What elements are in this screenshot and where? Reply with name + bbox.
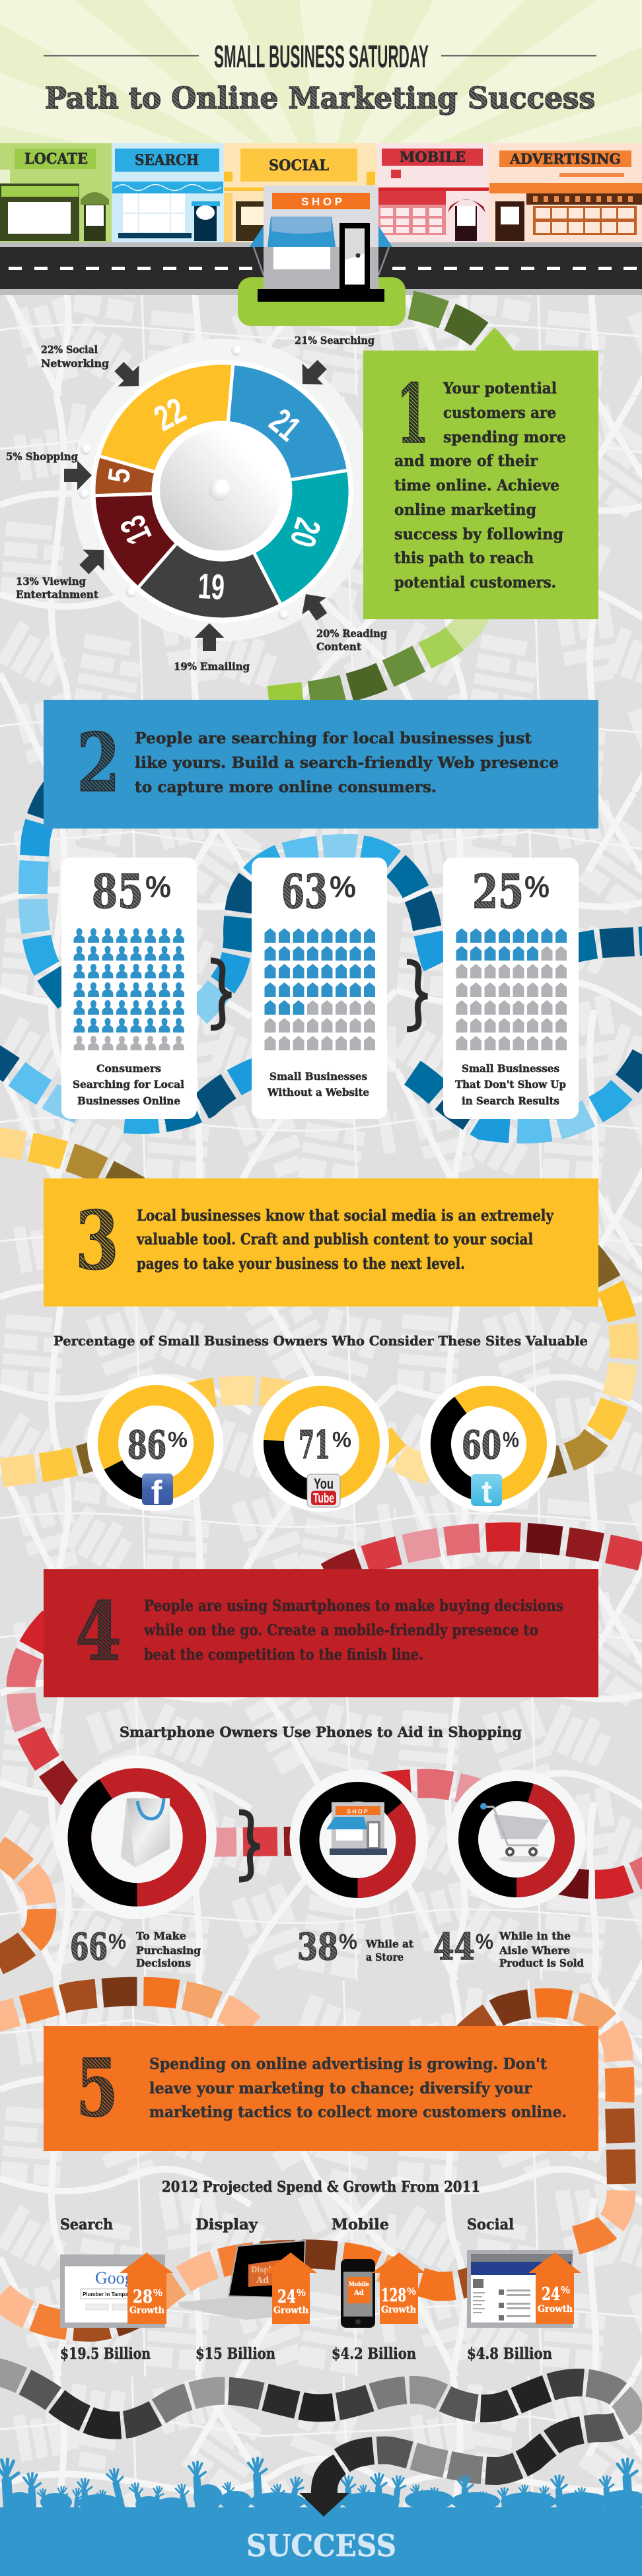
card: 85% consumers: Businesses Online [77,1095,180,1107]
image: laptop [178,2241,310,2320]
path: orange [0,1848,622,2327]
panel 5: leave your marketing to chance; diversify your [149,2080,532,2097]
growth arrow 128%: % [407,2286,416,2297]
icon: shopping bag [121,1798,170,1868]
icon: shopping cart [480,1803,550,1862]
card: 25% not in search [443,858,579,1119]
house pictogram [456,928,567,1050]
donut: twitter 60%: % [503,1427,519,1452]
image: google browser: Google [95,2268,146,2288]
growth arrow 24%: 24 [277,2287,296,2307]
growth arrow 24%: 24 [542,2284,560,2305]
segment: searching 21 [228,364,348,480]
growth arrow 24% [264,2253,317,2324]
icon: facebook: f [151,1474,162,1511]
storefront: advertising: ADVERTISING [509,151,621,167]
column: social: Social [467,2216,514,2233]
shop building: SHOP [301,195,342,208]
wheel labels and arrows: Entertainment [16,588,99,601]
panel 3: pages to take your business to the next level. [137,1255,465,1273]
icon: mini shop [326,1802,387,1855]
panel 1: potential customers. [394,574,556,592]
panel 2: People are searching for local businesses just [135,729,532,747]
stat: 66%: 66 [70,1925,108,1968]
crowd silhouette [0,2458,642,2576]
icon: youtube: Tube [313,1491,334,1506]
panel 4: beat the competition to the finish line. [144,1646,423,1664]
card: 63% no website: % [330,869,356,904]
image: smartphone: Ad [353,2289,364,2297]
donut: youtube 71%: 71 [299,1423,330,1468]
panel 5: 5 [76,2042,118,2135]
icon: twitter: t [482,1475,492,1510]
column: mobile: $4.2 Billion [332,2345,416,2363]
card: 25% not in search: in Search Results [462,1095,559,1107]
panel 1: time online. Achieve [394,477,559,494]
column: social [467,2216,581,2363]
card: 63% no website: 63 [281,864,328,919]
green start tab [238,277,406,326]
panel 1: customers are [443,404,556,422]
panel 1: online marketing [394,501,536,519]
wheel labels and arrows: Networking [41,357,109,370]
wheel numbers: 22 [148,390,192,439]
path: red [21,1537,642,1884]
image: smartphone [341,2259,375,2328]
header sunburst background [0,0,642,198]
path: green [264,305,522,701]
image: google browser: Plumber in Tampa, FL [83,2291,137,2297]
storefront: social [224,143,376,242]
stat: 66%: Purchasing [136,1944,201,1957]
column: social: $4.8 Billion [467,2345,552,2363]
column: search: Search [60,2216,113,2233]
column: display: Display [196,2216,258,2233]
growth arrow 24%: Growth [538,2304,573,2315]
panel 4: 4 [75,1584,122,1679]
path: yellow [0,1141,624,1474]
heading: valuable sites: Percentage of Small Business Owners Who Consider These Sites Valuable [54,1333,588,1349]
stat: 44%: 44 [433,1925,475,1968]
stat: 38%: % [339,1930,357,1953]
donut: twitter 60% [420,1376,556,1512]
stat: 66%: Decisions [136,1957,191,1969]
card: 63% no website: Small Businesses [269,1070,367,1083]
stat: 66%: % [108,1930,126,1953]
storefront: search [112,143,224,242]
wheel chart: internet time [71,339,374,641]
path: blue [0,789,642,1129]
panel 1: and more of their [394,452,538,470]
image: laptop: Ad [256,2276,269,2286]
panel 1: this path to reach [394,549,534,567]
growth arrow 24%: Growth [273,2305,308,2316]
panel 2: 2 [77,715,120,810]
segment: emailing 19 [138,543,281,619]
stat: 38%: 38 [297,1925,338,1968]
column: mobile: Mobile [332,2216,389,2233]
stat: 38% [297,1925,417,1968]
card: 85% consumers: 85 [92,864,143,919]
donut: 38% at a store [289,1769,428,1908]
column: mobile [332,2216,425,2363]
panel 4: People are using Smartphones to make buying decisions [144,1597,563,1615]
panel 3: valuable tool. Craft and publish content to your social [136,1231,533,1248]
wheel labels and arrows: 13% Viewing [16,575,86,588]
people pictogram [74,928,184,1050]
card: 85% consumers: Searching for Local [73,1078,184,1091]
icon: youtube: You [314,1475,334,1492]
wheel numbers: 20 [282,514,328,552]
panel 1: spending more [443,428,566,446]
column: search [60,2216,173,2363]
card: 63% no website [252,858,387,1119]
growth arrow 28%: % [153,2288,162,2299]
wheel labels and arrows: 19% Emailing [174,660,250,673]
icon: mini shop: SHOP [347,1808,369,1815]
growth arrow 128% [372,2253,425,2324]
success label: SUCCESS [246,2528,396,2563]
heading: smartphone owners: Smartphone Owners Use Phones to Aid in Shopping [120,1724,522,1740]
panel 1: 1 [396,367,429,462]
arrow to success [299,2455,349,2517]
wheel numbers [101,390,328,607]
column: display: $15 Billion [196,2345,275,2363]
wheel labels and arrows: Content [316,640,362,653]
wheel labels and arrows: 20% Reading [316,627,387,640]
stat: 44% [433,1925,584,1969]
path: grey [0,2370,629,2471]
column: search: $19.5 Billion [60,2345,151,2363]
title: Path to Online Marketing Success [45,81,595,116]
card: 25% not in search: That Don't Show Up [455,1078,566,1091]
stat: 38%: While at [365,1938,414,1950]
panel 3 [44,1178,598,1306]
image: social page browser [467,2250,573,2328]
image: google browser [60,2254,165,2328]
growth arrow 128%: 128 [381,2286,406,2306]
segment: social networking 22 [99,363,233,472]
panel 3: Local businesses know that social media is an extremely [137,1207,554,1225]
donut: 44% in the aisle [447,1769,586,1908]
donut: youtube 71%: % [332,1427,351,1452]
donut: youtube 71% [253,1376,389,1512]
wheel hub [160,429,281,551]
wheel knob [209,479,231,501]
icon: twitter [471,1474,502,1510]
segment: reading content 20 [254,470,350,605]
stat: 38%: a Store [366,1951,404,1963]
image: laptop: Display [251,2265,281,2274]
donut: facebook 86% [87,1375,223,1511]
panel 1: success by following [394,525,563,543]
brace connector 2 [407,962,427,1029]
panel 2: to capture more online consumers. [135,778,437,796]
storefront: mobile: MOBILE [400,149,466,165]
donut: facebook 86%: % [168,1427,188,1452]
growth arrow 28%: 28 [133,2287,153,2307]
wheel labels and arrows [6,334,387,673]
storefront: advertising [489,143,642,242]
wheel pegs [79,345,289,620]
panel 1 [363,351,598,619]
panel 2: like yours. Build a search-friendly Web presence [135,754,559,772]
panel 3: 3 [75,1193,119,1288]
wheel labels and arrows: 21% Searching [295,334,374,347]
stat: 44%: Aisle Where [499,1944,570,1957]
column: display [178,2216,317,2363]
storefront: locate: LOCATE [24,151,88,168]
storefront: mobile [376,143,489,242]
stat: 44%: While in the [499,1930,571,1942]
panel 5: Spending on online advertising is growing. Don't [149,2055,547,2073]
card: 85% consumers: Consumers [96,1062,161,1075]
growth arrow 28%: Growth [129,2305,164,2316]
storefront: search: SEARCH [135,152,199,169]
heading: projected spend: 2012 Projected Spend & Growth From 2011 [162,2179,480,2196]
card: 25% not in search: Small Businesses [462,1062,559,1075]
wheel numbers: 21 [262,401,308,449]
brace connector 1 [211,961,231,1028]
wheel numbers: 13 [112,510,160,550]
house pictogram [264,928,375,1050]
wheel numbers: 5 [101,465,137,485]
panel 5 [44,2026,598,2151]
card: 85% consumers: % [145,869,171,904]
panel 1: Your potential [443,380,557,397]
stat: 66% [70,1925,205,1969]
growth arrow 24%: % [297,2288,306,2299]
brace connector [239,1812,260,1880]
storefront: locate [0,143,112,242]
wheel labels and arrows: 5% Shopping [6,450,78,463]
panel 4 [44,1569,598,1697]
image: smartphone: Mobile [349,2282,369,2288]
card: 63% no website: Without a Website [267,1086,369,1099]
donut: 66% purchasing decisions [55,1755,217,1919]
stat: 44%: Product is Sold [499,1957,584,1969]
growth arrow 128%: Growth [381,2305,416,2315]
stat: 44%: % [476,1930,493,1953]
panel 4: while on the go. Create a mobile-friendly presence to [143,1621,538,1639]
shop building [250,186,392,302]
road [0,242,642,295]
growth arrow 24%: % [561,2285,570,2296]
segment: shopping 5 [94,456,156,496]
icon: facebook [142,1474,173,1511]
panel 2 [44,700,598,829]
donut: facebook 86%: 86 [127,1423,166,1468]
storefront: social: SOCIAL [269,157,329,174]
wheel numbers: 19 [197,566,225,607]
card: 25% not in search: 25 [472,864,524,919]
panel 5: marketing tactics to collect more customers online. [149,2103,567,2121]
growth arrow 24% [528,2253,581,2324]
segment: viewing entertainment 13 [94,494,177,588]
wheel labels and arrows: 22% Social [41,343,98,356]
donut: twitter 60%: 60 [462,1423,501,1468]
card: 85% consumers [61,858,197,1119]
icon: youtube [307,1474,340,1507]
card: 25% not in search: % [524,869,550,904]
growth arrow 28% [120,2253,173,2324]
stat: 66%: To Make [136,1930,186,1942]
